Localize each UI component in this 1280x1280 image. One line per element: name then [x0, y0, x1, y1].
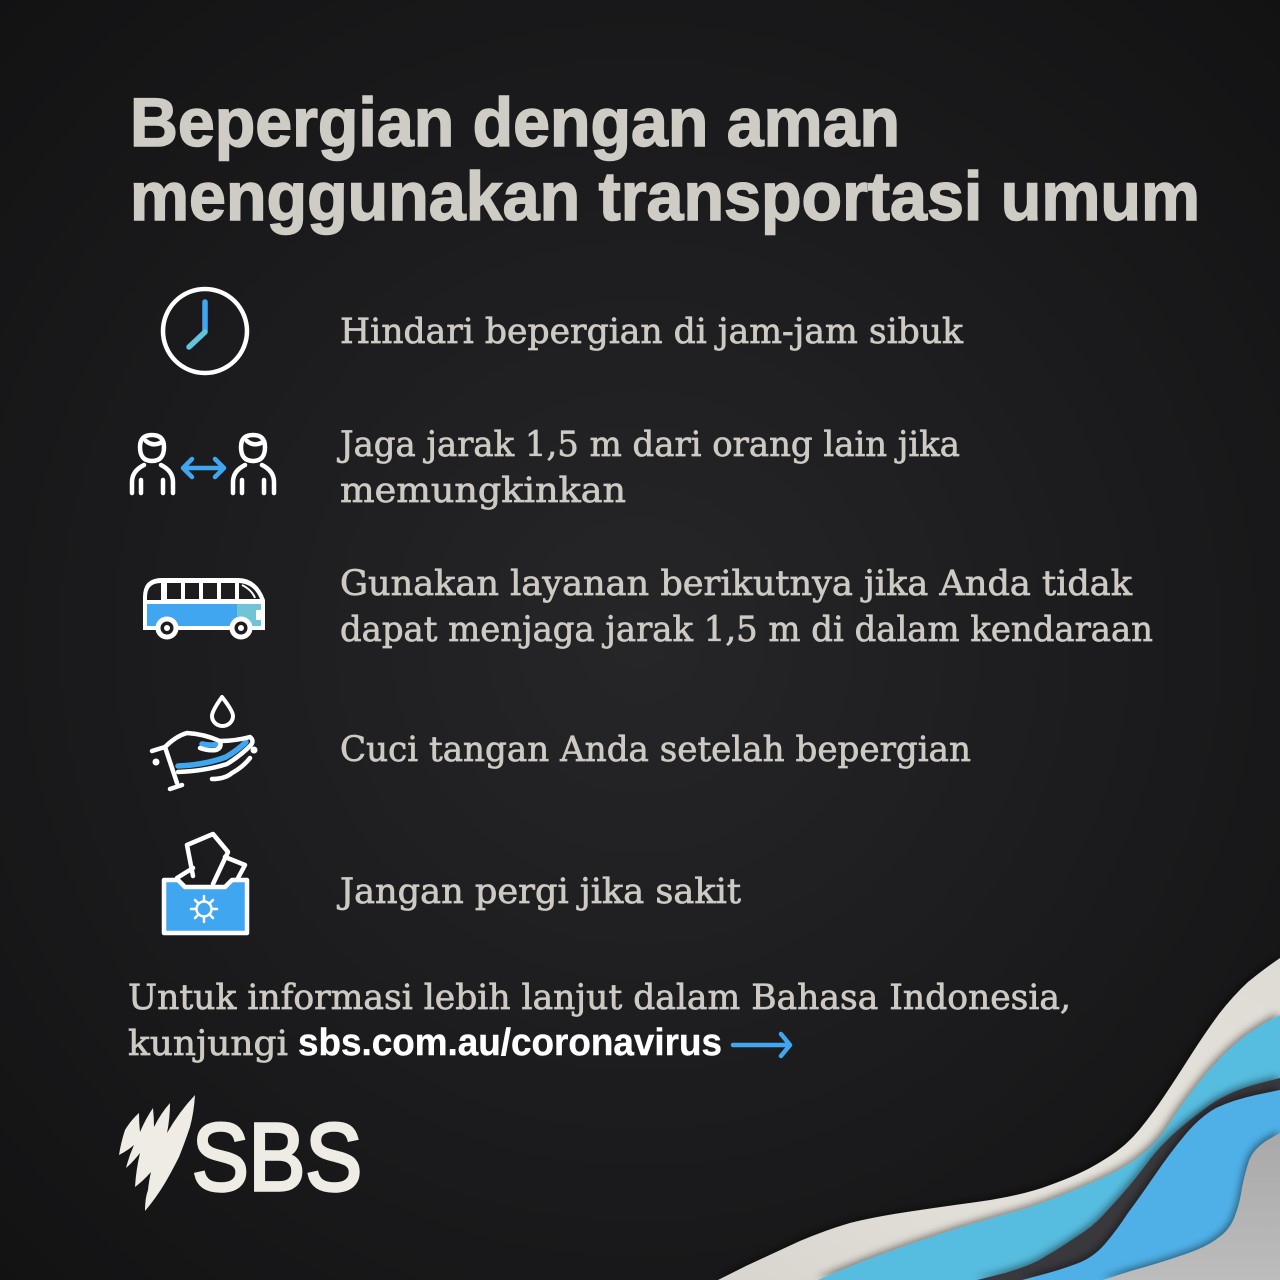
footer text: kunjungi [128, 1024, 288, 1064]
text: avoid peak hours: Hindari bepergian di jam-jam sibuk [340, 312, 964, 352]
text: stay home if sick: Jangan pergi jika sakit [337, 872, 741, 912]
footer text [128, 978, 1071, 1064]
decorative waves [718, 958, 1280, 1280]
icon: clock [163, 289, 247, 373]
arrow [733, 1034, 790, 1056]
title [130, 84, 1200, 235]
text: keep distance [337, 425, 960, 511]
text: use next service [340, 564, 1153, 650]
icon: tissue box [164, 834, 247, 933]
title: menggunakan transportasi umum [130, 158, 1200, 235]
SBS logo: SBS [192, 1104, 362, 1211]
SBS logo [119, 1095, 362, 1211]
icon: people keeping distance [132, 435, 274, 493]
text: wash hands: Cuci tangan Anda setelah bepergian [340, 730, 971, 770]
text: keep distance: memungkinkan [340, 471, 626, 511]
footer text: Untuk informasi lebih lanjut dalam Bahasa Indonesia, [128, 978, 1071, 1018]
footer text: sbs.com.au/coronavirus [298, 1022, 722, 1064]
icon: bus [143, 578, 265, 637]
icon: hand wash [152, 697, 258, 789]
text: use next service: dapat menjaga jarak 1,5 m di dalam kendaraan [340, 610, 1153, 650]
text: use next service: Gunakan layanan berikutnya jika Anda tidak [340, 564, 1133, 604]
text: keep distance: Jaga jarak 1,5 m dari orang lain jika [337, 425, 960, 465]
title: Bepergian dengan aman [130, 84, 900, 161]
